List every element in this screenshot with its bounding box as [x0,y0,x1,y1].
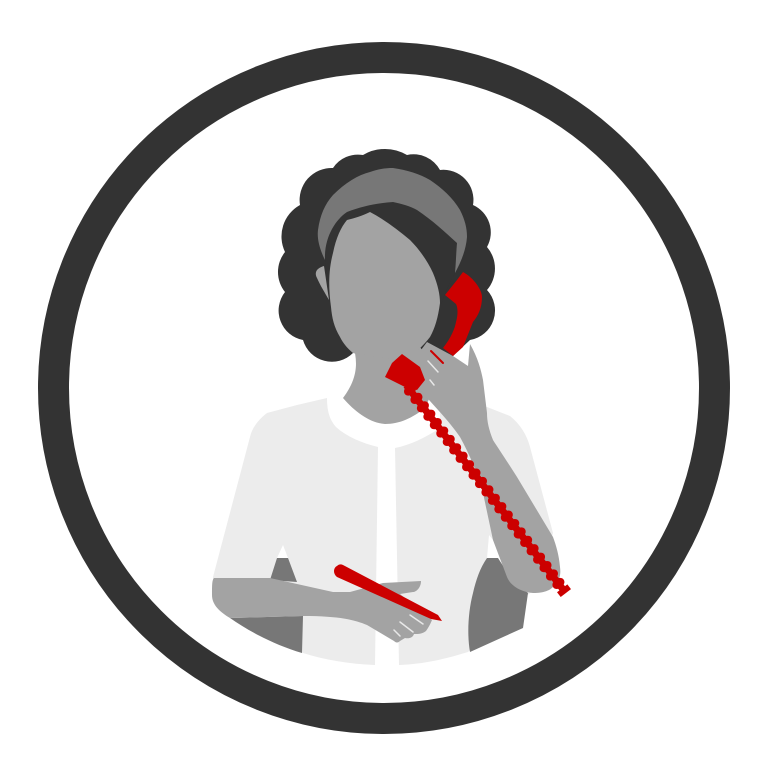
shirt [213,398,553,665]
inner hair [325,202,457,305]
pen [334,564,442,621]
hair [278,149,495,362]
finger lines [394,351,443,636]
handset mouthpiece [385,354,425,390]
torso shadow left [230,558,303,653]
torso shadow right [468,558,528,652]
face [329,212,440,360]
left arm and hand [212,578,432,642]
notch gaps [277,535,512,580]
neck [343,340,440,424]
handset earpiece [443,272,482,356]
figure [212,149,571,665]
coiled cord [401,381,571,597]
ring [54,58,714,718]
headband [318,168,467,273]
ear [316,266,329,300]
collar and placket [327,385,440,665]
right arm and hand [417,342,560,593]
